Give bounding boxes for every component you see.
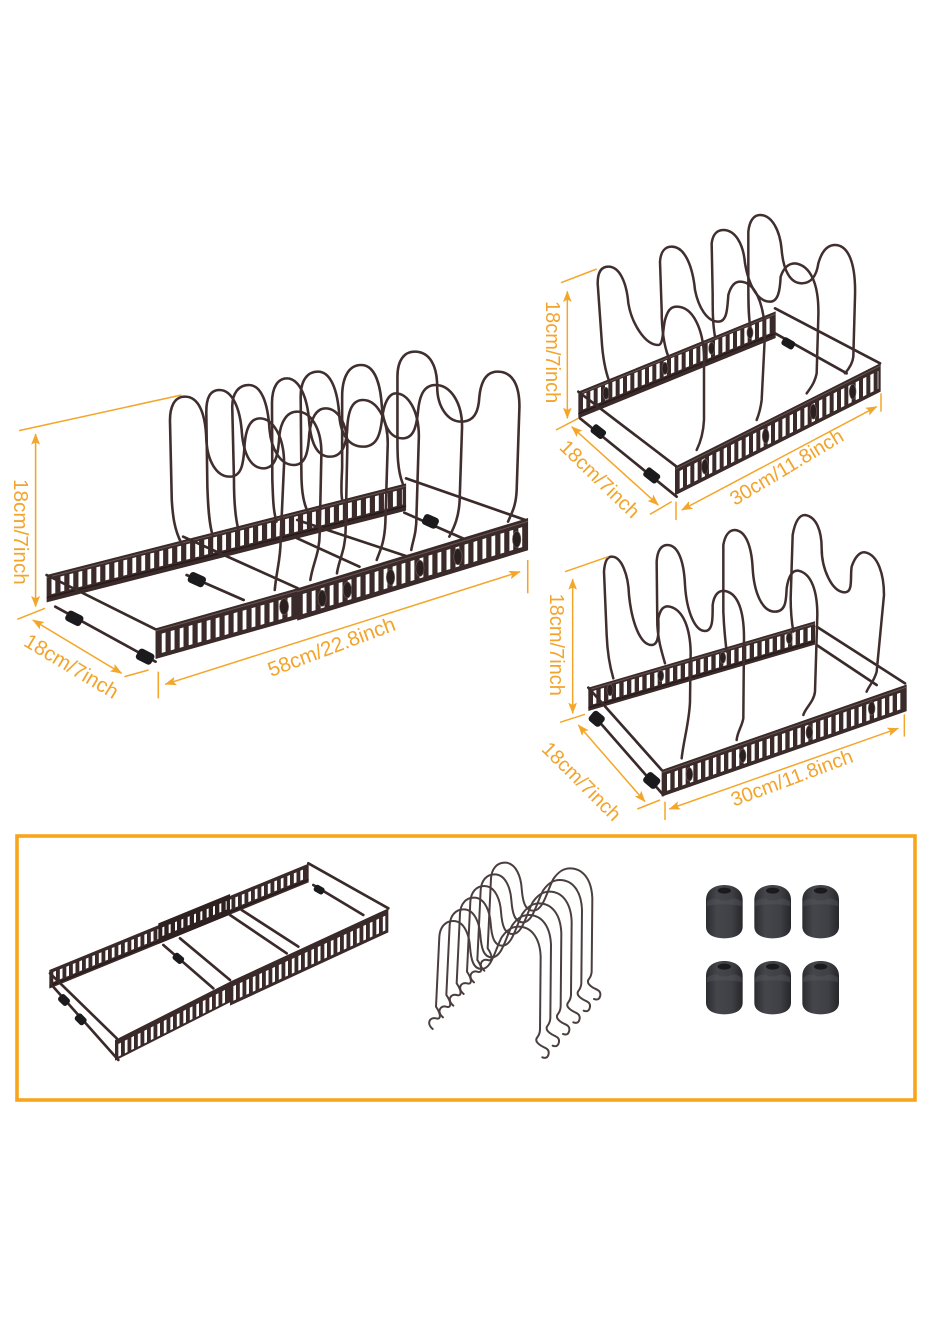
back slotted rail [49,864,309,989]
cross bars [50,863,388,1060]
front slotted rail [675,363,881,495]
label: rack depth: 18cm/7inch [20,630,122,704]
back slotted rail [578,311,776,418]
part: empty expandable frame [49,863,388,1061]
label: rack height: 18cm/7inch [9,479,32,585]
dimension lines [17,395,528,698]
back slotted rail [588,621,815,711]
label: depth: 18cm/7inch [555,436,644,523]
end bumpers [589,336,796,485]
dimension lines [556,269,881,520]
label: depth: 18cm/7inch [537,738,625,826]
front slotted rail left [115,981,231,1061]
label: length: 30cm/11.8inch [728,746,856,811]
front slotted rail left [156,588,298,659]
wire dividers [604,515,884,758]
cross bars [47,478,525,662]
bumpers [57,884,326,1026]
end bumpers [64,513,440,666]
back slotted rail [47,483,406,602]
rail holes [603,327,856,474]
front slotted rail right [297,518,528,621]
seven wire dividers [170,352,519,590]
panel: included parts [17,836,915,1100]
dimension lines [560,557,904,820]
rack: 30cm with five-position dividers, top right [541,215,881,523]
label: height: 18cm/7inch [545,594,567,696]
wire dividers [598,215,855,450]
rail holes [607,633,875,781]
end bumpers [587,709,662,790]
front slotted rail right [230,908,388,1006]
label: length: 30cm/11.8inch [726,425,848,510]
rack: 30cm wide-spaced dividers, right [537,515,907,826]
rack: fully extended 58cm with dimensions [17,352,528,698]
part: six rubber end caps [706,885,839,1014]
back rail overlap sleeve [158,894,230,944]
cross bars [578,308,880,497]
cross bars [588,627,905,795]
label: height: 18cm/7inch [541,301,563,403]
front slotted rail [662,684,907,797]
part: six wire dividers [429,863,600,1058]
rail holes [280,531,521,615]
label: rack length: 58cm/22.8inch [265,613,399,682]
